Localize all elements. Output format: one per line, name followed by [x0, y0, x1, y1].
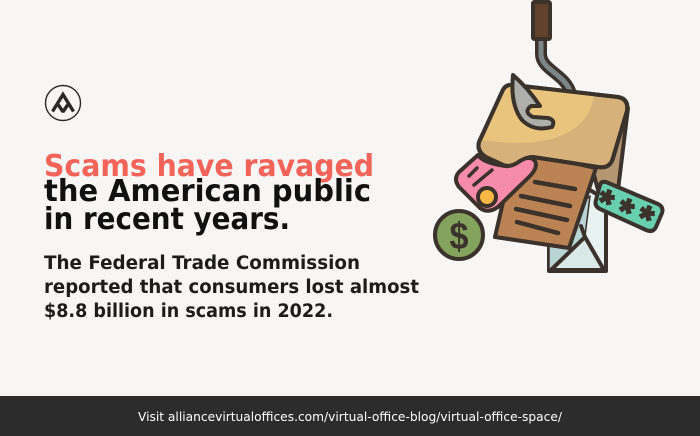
footer bar: [0, 396, 700, 436]
password tag: *: [630, 197, 659, 242]
body text: reported that consumers lost almost: [44, 277, 419, 298]
footer bar: Visit alliancevirtualoffices.com/virtual-office-blog/virtual-office-space/: [138, 410, 563, 424]
illustration: scam hook with wallet, tags and money: [435, 2, 662, 271]
dollar coin: [435, 211, 483, 259]
heading: Scams have ravaged: [44, 149, 374, 184]
password tag: [590, 181, 662, 242]
paper note: [495, 150, 596, 248]
heading: in recent years.: [44, 202, 290, 237]
body text: $8.8 billion in scams in 2022.: [44, 301, 333, 322]
heading: the American public: [44, 174, 371, 209]
pink tag: [456, 155, 536, 211]
logo: mountain emblem in circle: [46, 86, 80, 120]
envelope: [549, 190, 606, 271]
dollar coin: $: [450, 216, 468, 258]
password tag: *: [590, 181, 619, 226]
box back: [590, 108, 628, 190]
body text: The Federal Trade Commission: [44, 253, 360, 274]
heading: [44, 149, 374, 237]
hook shank: [541, 38, 571, 94]
hook handle: [533, 2, 550, 39]
password tag: *: [610, 190, 639, 235]
body text: [44, 253, 419, 322]
box lid: [478, 85, 627, 167]
hook barb: [512, 75, 553, 128]
